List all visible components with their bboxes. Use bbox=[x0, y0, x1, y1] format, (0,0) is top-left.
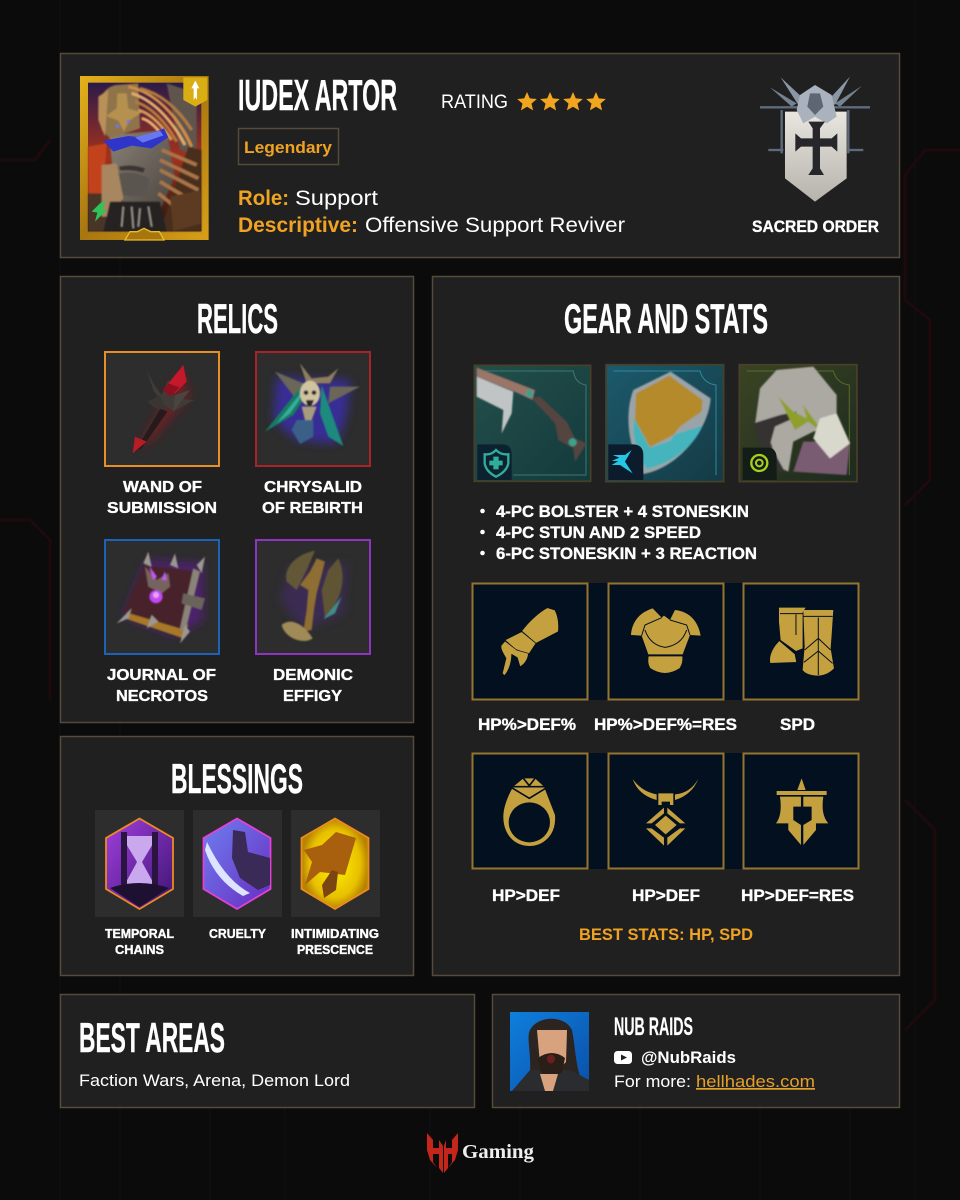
faction name: SACRED ORDER bbox=[752, 218, 879, 236]
role line bbox=[238, 187, 378, 210]
website link: hellhades.com bbox=[696, 1072, 815, 1091]
faction emblem: sacred order bbox=[760, 77, 870, 202]
slot: boots bbox=[744, 584, 858, 734]
blessing name bbox=[105, 927, 174, 957]
blessing name: INTIMIDATING bbox=[291, 927, 379, 941]
relic: chrysalid of rebirth bbox=[256, 352, 370, 517]
panel: best areas bbox=[60, 994, 474, 1108]
relic name: DEMONIC bbox=[273, 667, 353, 684]
slot: banner bbox=[741, 754, 858, 905]
best stats: BEST STATS: HP, SPD bbox=[579, 926, 753, 944]
hero portrait bbox=[80, 76, 209, 240]
role line: Support bbox=[295, 187, 378, 210]
website link bbox=[614, 1072, 815, 1091]
descriptive line: Descriptive: bbox=[238, 214, 358, 237]
relic name: JOURNAL OF bbox=[107, 667, 216, 684]
slot: chestplate bbox=[594, 584, 737, 734]
footer logo bbox=[427, 1133, 534, 1173]
relic: demonic effigy bbox=[256, 540, 370, 705]
role line: Role: bbox=[238, 187, 289, 210]
gear set bullet list: 6-PC STONESKIN + 3 REACTION bbox=[496, 545, 757, 563]
gear set bullet list: 4-PC STUN AND 2 SPEED bbox=[496, 524, 701, 542]
slot stat: HP>DEF bbox=[632, 887, 700, 905]
best areas list: Faction Wars, Arena, Demon Lord bbox=[79, 1071, 350, 1090]
relic name: EFFIGY bbox=[283, 688, 342, 705]
rating: RATING bbox=[441, 92, 508, 113]
best areas heading: BEST AREAS bbox=[79, 1014, 225, 1061]
gear set: speed shield bbox=[606, 365, 724, 482]
slot stat: SPD bbox=[780, 716, 815, 734]
panel: relics bbox=[60, 276, 414, 722]
blessing: temporal chains bbox=[95, 810, 184, 957]
relic name bbox=[262, 479, 363, 517]
relic: journal of necrotos bbox=[105, 540, 219, 705]
blessing name: CHAINS bbox=[115, 943, 164, 957]
relic name bbox=[107, 667, 216, 705]
slot stat: HP%>DEF% bbox=[478, 716, 576, 734]
relic name: OF REBIRTH bbox=[262, 500, 363, 517]
logo mark bbox=[427, 1133, 458, 1173]
relic name bbox=[273, 667, 353, 705]
panel: blessings bbox=[60, 736, 414, 976]
blessing name: CRUELTY bbox=[209, 927, 267, 941]
relic name: NECROTOS bbox=[116, 688, 208, 705]
slot stat: HP>DEF bbox=[492, 887, 560, 905]
gear heading: GEAR AND STATS bbox=[564, 295, 768, 342]
descriptive line: Offensive Support Reviver bbox=[365, 214, 625, 237]
blessing: intimidating prescence bbox=[291, 810, 380, 957]
slot stat: HP>DEF=RES bbox=[741, 887, 854, 905]
rating stars bbox=[517, 92, 606, 110]
creator avatar bbox=[510, 1012, 589, 1091]
panel: gear and stats bbox=[432, 276, 900, 976]
slot stat: HP%>DEF%=RES bbox=[594, 716, 737, 734]
blessings heading: BLESSINGS bbox=[171, 755, 303, 802]
descriptive line bbox=[238, 214, 625, 237]
panel: creator credit bbox=[492, 994, 900, 1108]
relics heading: RELICS bbox=[197, 295, 278, 342]
rarity badge: Legendary bbox=[244, 138, 333, 157]
slot: ring bbox=[472, 754, 588, 905]
relic name bbox=[107, 479, 217, 517]
gear set bullet list: 4-PC BOLSTER + 4 STONESKIN bbox=[496, 503, 749, 521]
gear set bullet list bbox=[480, 503, 757, 563]
gear set: stoneskin helm bbox=[739, 365, 857, 482]
creator name: NUB RAIDS bbox=[614, 1013, 693, 1041]
blessing name: PRESCENCE bbox=[297, 943, 373, 957]
website link: For more: bbox=[614, 1072, 691, 1091]
relic name: WAND OF bbox=[123, 479, 202, 496]
hero name: IUDEX ARTOR bbox=[238, 71, 397, 120]
rarity badge bbox=[238, 128, 338, 164]
blessing name: TEMPORAL bbox=[105, 927, 174, 941]
logo text: Gaming bbox=[462, 1141, 534, 1163]
armor slots background bands bbox=[587, 583, 743, 869]
youtube handle: @NubRaids bbox=[641, 1048, 736, 1067]
gear set: bolster bbox=[474, 365, 591, 481]
blessing: cruelty bbox=[193, 810, 282, 941]
slot: amulet bbox=[608, 754, 724, 905]
relic name: SUBMISSION bbox=[107, 500, 217, 517]
relic name: CHRYSALID bbox=[264, 479, 362, 496]
panel: hero header bbox=[60, 54, 900, 258]
rating bbox=[441, 92, 606, 113]
blessing name bbox=[291, 927, 379, 957]
slot: gauntlets bbox=[472, 584, 588, 734]
relic: wand of submission bbox=[105, 352, 219, 517]
